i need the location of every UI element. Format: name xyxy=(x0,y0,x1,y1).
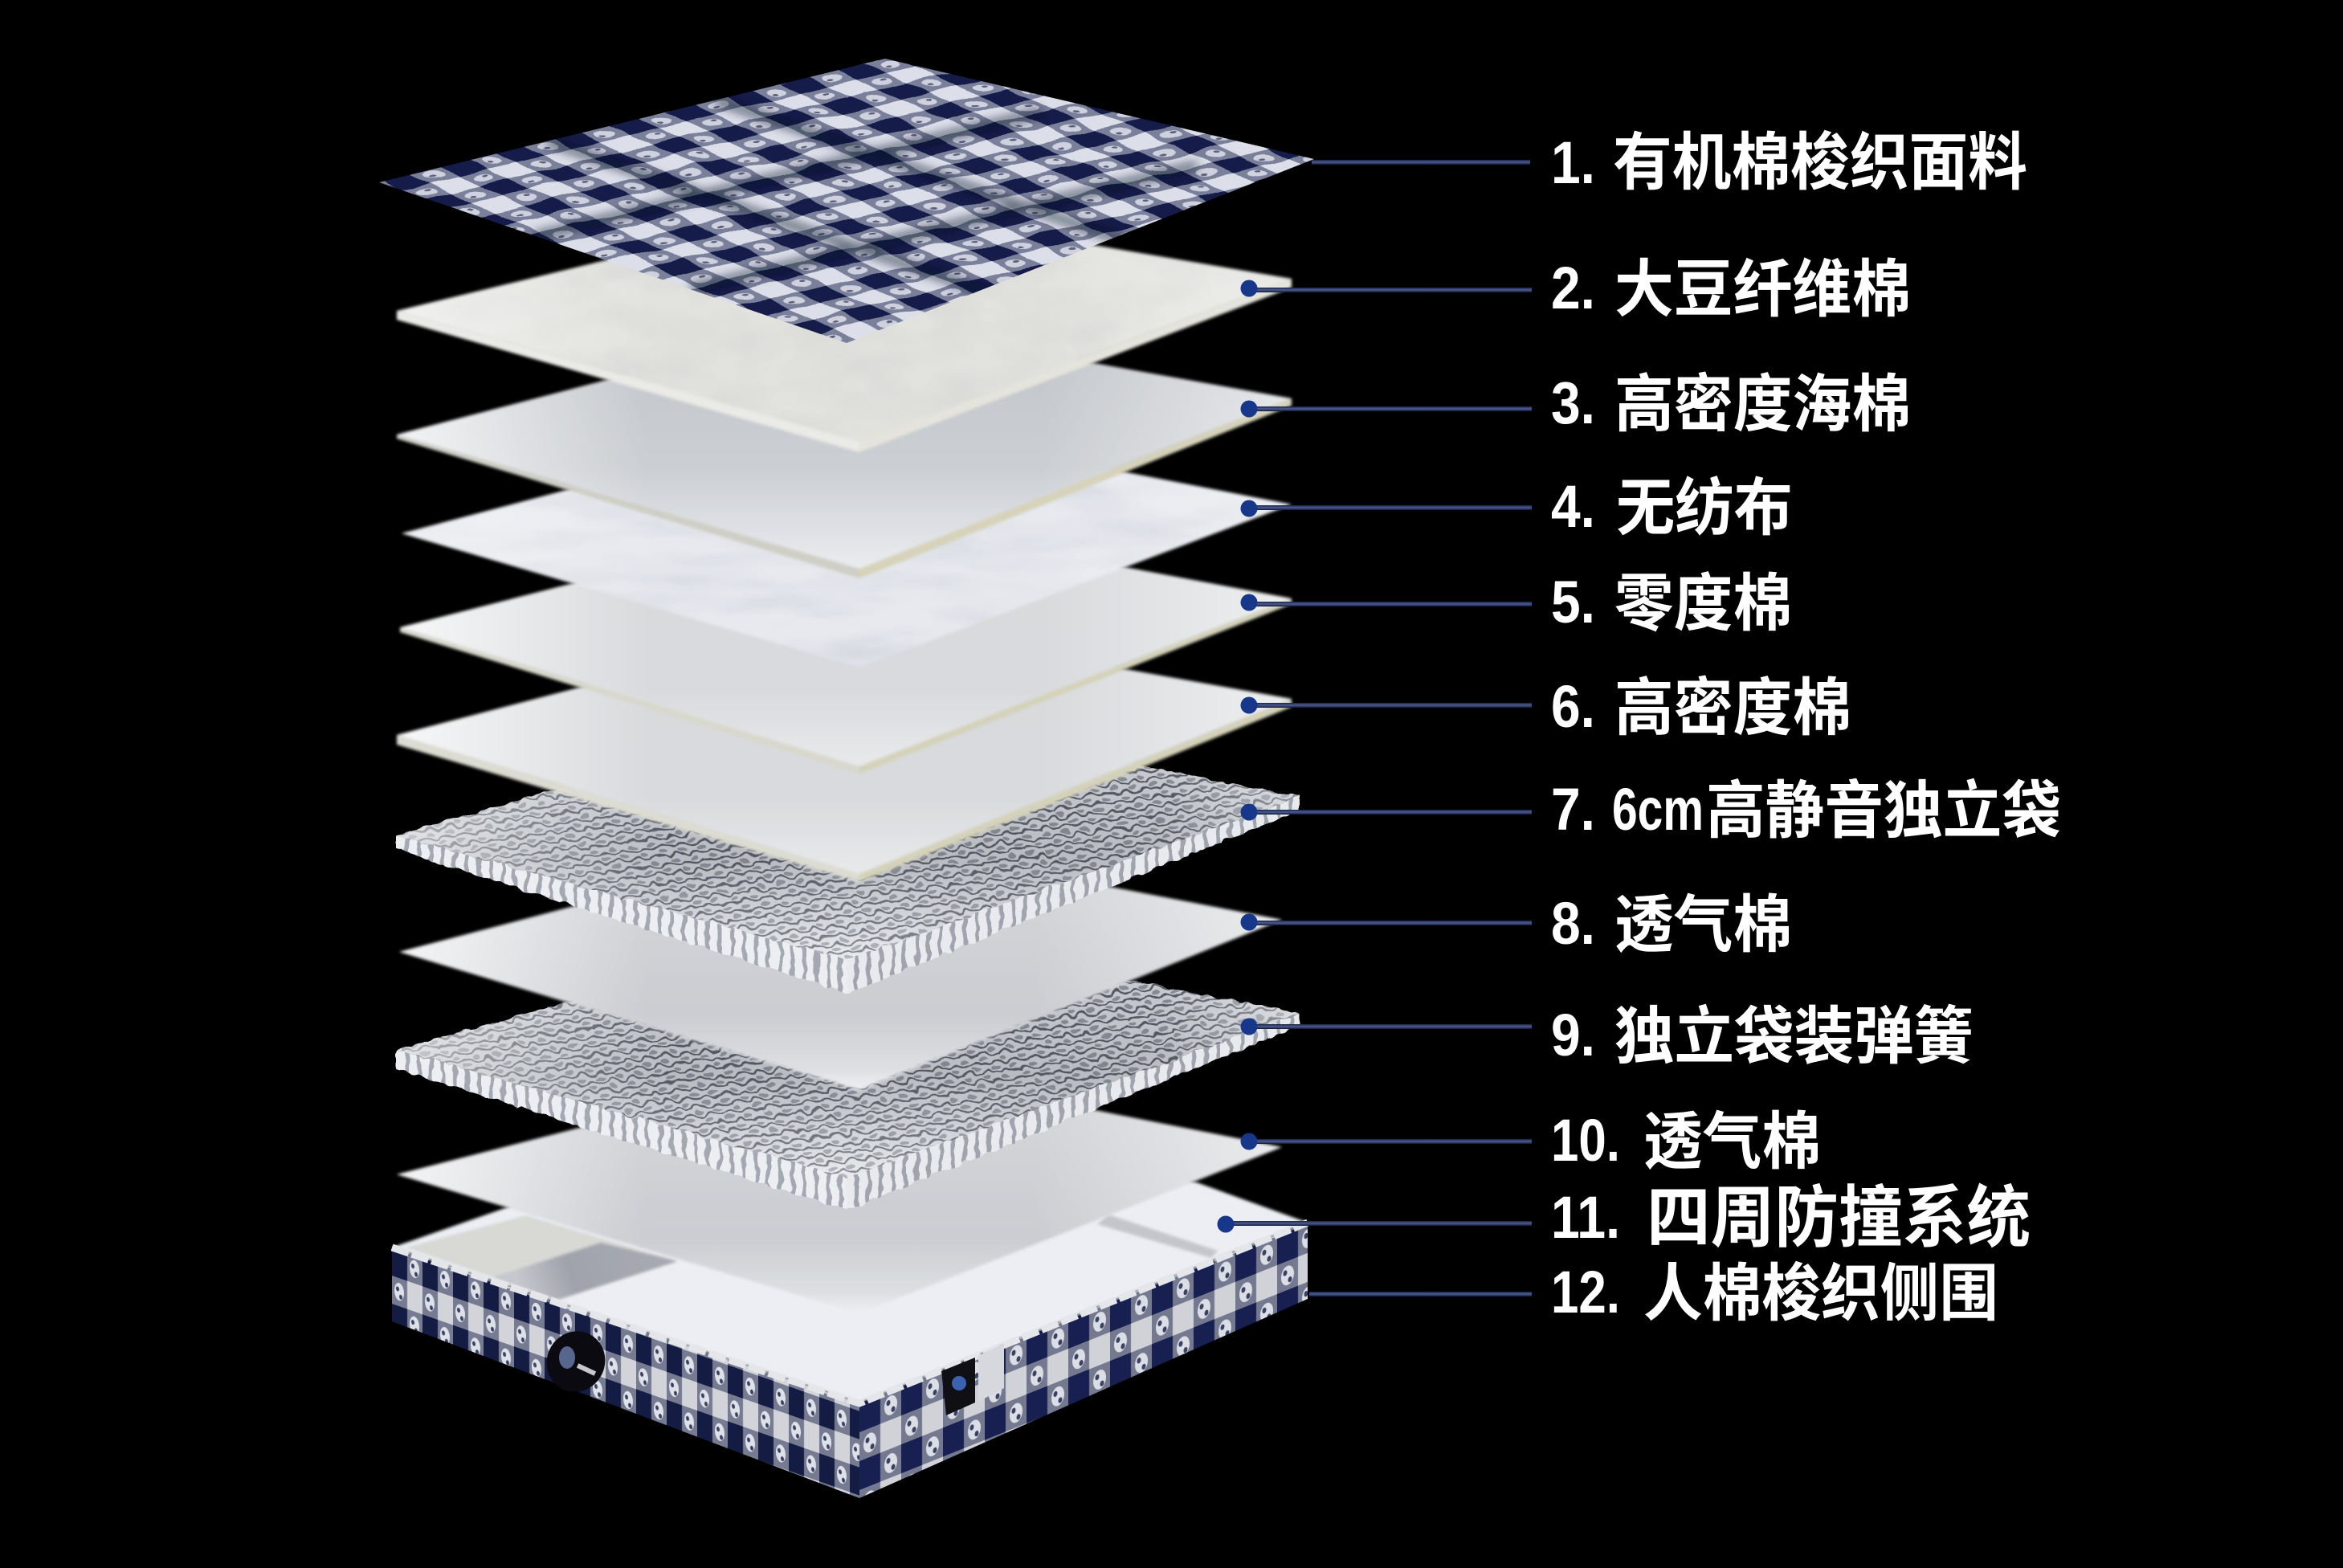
label 4 xyxy=(1551,472,1793,543)
label 12: 人棉梭织侧围 xyxy=(1643,1258,1998,1329)
quilting seams xyxy=(535,100,1197,302)
layer 1: organic cotton jacquard fabric xyxy=(379,59,1314,343)
label 7: 7. xyxy=(1551,776,1595,843)
layer 5: zero-degree cotton xyxy=(400,514,1292,774)
label 6: 高密度棉 xyxy=(1614,672,1851,743)
label 3: 高密度海棉 xyxy=(1614,369,1911,439)
layer 6: high density cotton xyxy=(397,619,1292,882)
leader 6 with dot xyxy=(1240,697,1532,713)
label 10: 10. xyxy=(1551,1107,1620,1174)
label 8: 8. xyxy=(1551,890,1595,957)
leader 5 with dot xyxy=(1240,594,1532,610)
label 5: 5. xyxy=(1551,569,1595,635)
label 11: 11. xyxy=(1551,1184,1620,1251)
layer 3: high density foam xyxy=(397,318,1292,578)
leader 12 xyxy=(1309,1292,1532,1296)
leader 10 with dot xyxy=(1240,1133,1532,1150)
leader 1 xyxy=(1312,160,1530,165)
label 5: 零度棉 xyxy=(1614,568,1792,639)
layer 7: 6cm silent pocket springs xyxy=(397,707,1300,994)
sewn label on right side xyxy=(941,1343,1004,1415)
label 7: 高静音独立袋 xyxy=(1706,775,2061,846)
label 9: 独立袋装弹簧 xyxy=(1614,1001,1974,1072)
layer 10: breathable cotton xyxy=(397,1060,1282,1313)
label 7: 6cm xyxy=(1612,776,1704,843)
leader 7 with dot xyxy=(1240,803,1532,821)
leader 9 with dot xyxy=(1240,1019,1532,1035)
side panel: left jacquard xyxy=(392,1247,859,1498)
leader 2 with dot xyxy=(1240,280,1532,297)
leader 11 with dot xyxy=(1218,1216,1532,1232)
layer 2: soybean fibre cotton xyxy=(397,202,1292,452)
label 8: 透气棉 xyxy=(1614,889,1792,960)
layer 4: non-woven fabric xyxy=(402,417,1292,668)
layer 9: pocket springs xyxy=(397,924,1300,1211)
label 11: 四周防撞系统 xyxy=(1647,1180,2031,1256)
left wall shadow band xyxy=(493,1243,677,1300)
logo badge on left side xyxy=(537,1321,615,1402)
label 10: 透气棉 xyxy=(1643,1106,1821,1177)
side panel: right jacquard xyxy=(859,1223,1308,1498)
label 2: 大豆纤维棉 xyxy=(1614,254,1911,325)
left inner wall xyxy=(406,1215,677,1300)
top rim and inner floor xyxy=(392,1109,1308,1403)
label 6: 6. xyxy=(1551,673,1595,740)
white piping along edges xyxy=(392,1223,1308,1403)
leader 4 with dot xyxy=(1240,500,1532,517)
leader 8 with dot xyxy=(1240,914,1532,930)
base mattress: border frame with jacquard side panels xyxy=(392,1109,1308,1498)
right inner wall xyxy=(1097,1215,1218,1258)
label 2: 2. xyxy=(1551,255,1595,321)
label 7 xyxy=(1551,775,2061,846)
leader 3 with dot xyxy=(1240,400,1532,418)
label 3: 3. xyxy=(1551,370,1595,436)
label 9: 9. xyxy=(1551,1002,1595,1068)
label 1: 有机棉梭织面料 xyxy=(1613,127,2027,198)
layer 8: breathable cotton xyxy=(399,835,1282,1090)
label 4: 无纺布 xyxy=(1616,472,1793,543)
label 1: 1. xyxy=(1551,129,1595,196)
label 4: 4. xyxy=(1551,473,1595,540)
label 12: 12. xyxy=(1551,1259,1620,1325)
label 10 xyxy=(1551,1106,1821,1177)
